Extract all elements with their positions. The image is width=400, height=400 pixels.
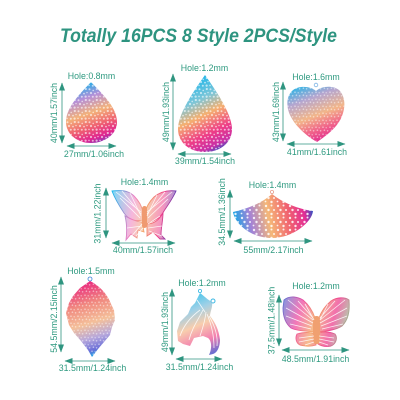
- width arrow: [112, 242, 175, 244]
- height arrow: [282, 82, 284, 141]
- hole label: Hole:1.4mm: [121, 177, 168, 187]
- width label: 48.5mm/1.91inch: [282, 354, 349, 364]
- height arrow: [229, 190, 231, 238]
- hole label: Hole:1.2mm: [181, 63, 228, 73]
- width arrow: [176, 358, 222, 360]
- width arrow: [234, 240, 312, 242]
- heart pendant: [287, 83, 344, 142]
- height label: 31mm/1.22inch: [92, 183, 102, 244]
- width label: 55mm/2.17inch: [243, 245, 304, 255]
- height arrow: [60, 277, 62, 352]
- wing veins: [116, 191, 172, 238]
- width label: 39mm/1.54inch: [175, 156, 235, 166]
- height label: 54.5mm/2.15inch: [49, 285, 59, 353]
- teardrop pendant: [66, 82, 117, 143]
- hole label: Hole:1.4mm: [249, 180, 296, 190]
- panel: fish tail 1.2mm: [160, 278, 233, 372]
- height label: 34.5mm/1.36inch: [217, 178, 227, 246]
- hole label: Hole:0.8mm: [68, 71, 115, 81]
- width label: 41mm/1.61inch: [287, 147, 347, 157]
- width label: 31.5mm/1.24inch: [166, 362, 233, 372]
- height arrow: [278, 295, 280, 346]
- panel: heart 1.6mm: [271, 72, 347, 157]
- height arrow: [105, 188, 107, 238]
- teardrop pendant: [178, 75, 232, 152]
- panel: butterfly 1.4mm: [92, 177, 176, 255]
- width label: 27mm/1.06inch: [64, 149, 124, 159]
- height label: 43mm/1.69inch: [271, 82, 281, 142]
- panel: butterfly 1.2mm: [266, 281, 349, 364]
- height label: 37.5mm/1.48inch: [266, 287, 276, 354]
- panel: fan 1.4mm: [217, 178, 313, 255]
- width label: 31.5mm/1.24inch: [59, 363, 126, 373]
- hole label: Hole:1.5mm: [67, 266, 115, 276]
- panel: teardrop 1.2mm: [161, 63, 235, 166]
- height arrow: [172, 74, 174, 150]
- fan pendant: [233, 190, 313, 238]
- hole label: Hole:1.2mm: [292, 281, 340, 291]
- width arrow: [67, 145, 116, 147]
- height label: 49mm/1.93inch: [160, 292, 170, 352]
- height arrow: [171, 289, 173, 355]
- width arrow: [282, 349, 349, 351]
- leaf pendant: [66, 277, 115, 357]
- panel: leaf 1.5mm: [49, 266, 126, 373]
- height label: 40mm/1.57inch: [49, 83, 59, 143]
- hole label: Hole:1.2mm: [178, 278, 226, 288]
- butterfly pendant: [283, 297, 349, 346]
- height arrow: [61, 83, 63, 143]
- panel: teardrop 0.8mm: [49, 71, 124, 159]
- width arrow: [65, 360, 115, 362]
- hole label: Hole:1.6mm: [292, 72, 340, 82]
- width label: 40mm/1.57inch: [113, 245, 173, 255]
- butterfly pendant: [112, 191, 176, 240]
- title: Totally 16PCS 8 Style 2PCS/Style: [60, 26, 337, 47]
- width arrow: [178, 153, 231, 155]
- wing veins: [286, 300, 347, 345]
- fin veins: [180, 300, 217, 348]
- height label: 49mm/1.93inch: [161, 82, 171, 142]
- width arrow: [287, 143, 345, 145]
- fish tail pendant: [177, 289, 220, 355]
